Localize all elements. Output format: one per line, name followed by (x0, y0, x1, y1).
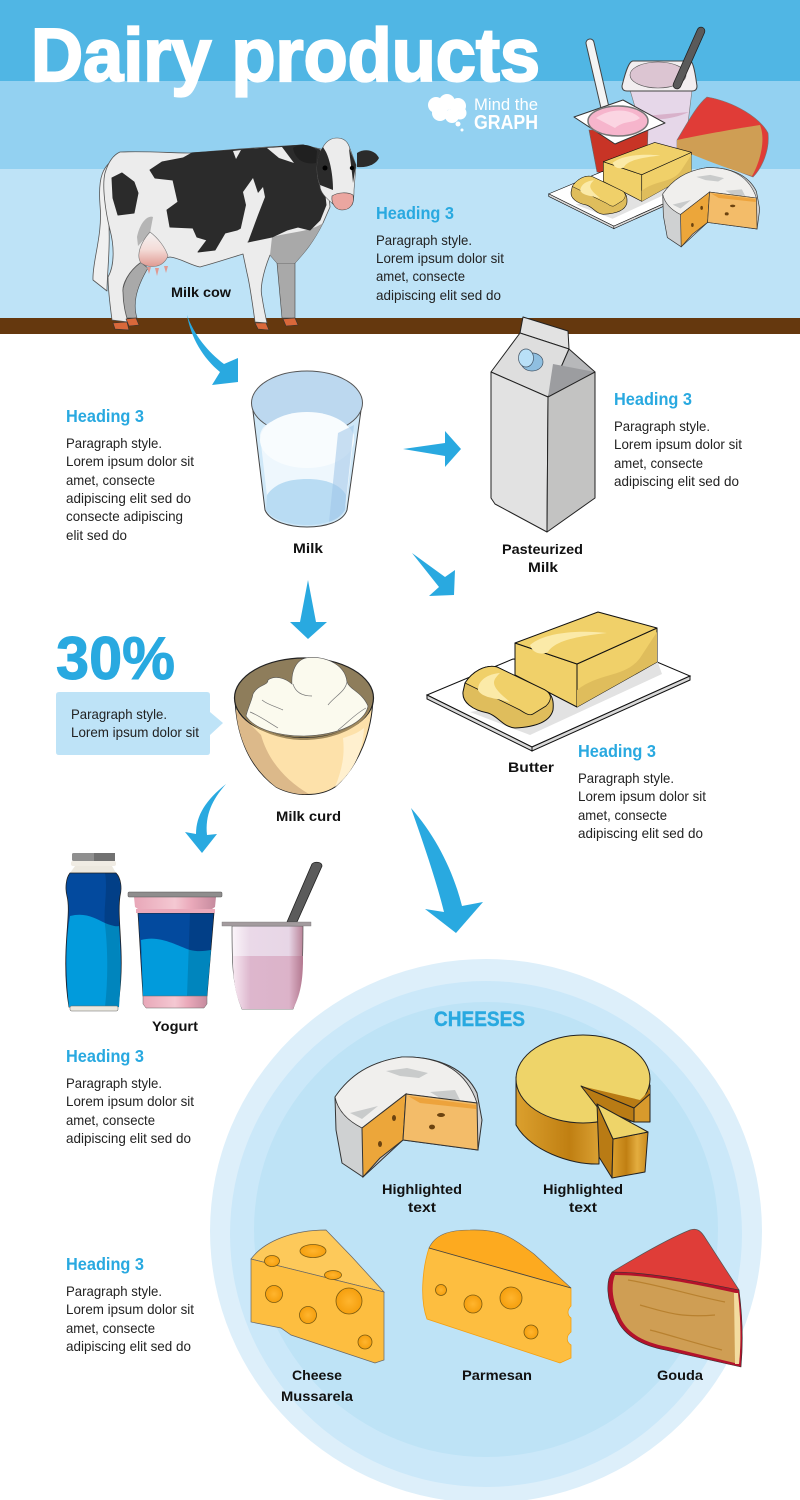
text block: butter: adipiscing elit sed do (578, 825, 703, 841)
label: Highlighted text (brie): text (408, 1199, 436, 1215)
text block: butter (578, 741, 706, 841)
logo: Mind the Graph (428, 94, 538, 134)
ground strip (0, 318, 800, 334)
text block: cheese note: Lorem ipsum dolor sit (66, 1301, 194, 1317)
text block: pasteurized: amet, consecte (614, 455, 703, 471)
yogurt pot with spoon (222, 862, 322, 1009)
text block: milk: amet, consecte (66, 472, 155, 488)
icon: bottle cap (518, 349, 543, 371)
label: Yogurt: Yogurt (152, 1018, 198, 1034)
grey chest (270, 223, 323, 263)
illustration: milk cow (93, 138, 379, 330)
label: Highlighted text (wheel): Highlighted (543, 1181, 623, 1197)
label: Milk curd: Milk curd (276, 808, 341, 824)
red yogurt cup (574, 43, 665, 176)
arrow: curd to yogurt (185, 784, 226, 853)
text block: yogurt: amet, consecte (66, 1112, 155, 1128)
hero food group (549, 31, 768, 247)
illustration: parmesan (423, 1230, 571, 1363)
label: Butter: Butter (508, 759, 555, 775)
illustration: brie (335, 1057, 482, 1177)
text block: milk: adipiscing elit sed do (66, 490, 191, 506)
label: Milk: Milk (293, 540, 323, 556)
text block: pasteurized (614, 389, 742, 489)
arrow: milk to butter (412, 553, 455, 596)
logo text: Mind the (474, 95, 538, 114)
text block: yogurt: adipiscing elit sed do (66, 1130, 191, 1146)
label: Cheese Mussarela: Cheese (292, 1367, 342, 1383)
text block: milk: consecte adipiscing (66, 508, 183, 524)
text block: cow heading (376, 203, 504, 303)
hooves (113, 318, 298, 330)
text block: pasteurized: Paragraph style. (614, 418, 710, 434)
text block: milk: Lorem ipsum dolor sit (66, 453, 194, 469)
label: Gouda: Gouda (657, 1367, 703, 1383)
black patches (112, 145, 326, 252)
white spots (233, 147, 294, 242)
gouda wedge (677, 97, 768, 177)
label: Pasteurized Milk (502, 541, 583, 575)
callout (56, 692, 223, 755)
far legs (122, 262, 148, 318)
yogurt cup (128, 892, 222, 1008)
text block: cheese note (66, 1254, 194, 1354)
text block: pasteurized: adipiscing elit sed do (614, 473, 739, 489)
rear yogurt cup (622, 31, 701, 148)
yogurt bottle (66, 853, 121, 1011)
illustration: cheese wheel (516, 1035, 650, 1178)
text block: milk: elit sed do (66, 527, 127, 543)
text block: milk: Heading 3 (66, 406, 144, 426)
label: Highlighted text (wheel): text (569, 1199, 597, 1215)
logo text: GRAPH (474, 112, 538, 134)
label: Highlighted text (brie): Highlighted (382, 1181, 462, 1197)
udder (139, 232, 168, 276)
text block: yogurt: Paragraph style. (66, 1075, 162, 1091)
arrow: cow to milk (187, 315, 238, 385)
arrow: milk to pasteurized (403, 431, 461, 467)
text block: butter: Heading 3 (578, 741, 656, 761)
grey flank shadow (137, 217, 153, 246)
label: Cheese Mussarela (281, 1367, 353, 1404)
illustration: glass of milk (252, 371, 362, 527)
text block: milk (66, 406, 194, 543)
text block: cow heading: adipiscing elit sed do (376, 287, 501, 303)
text block: yogurt: Lorem ipsum dolor sit (66, 1093, 194, 1109)
arrow: milk to curd (290, 580, 327, 639)
tail (93, 157, 118, 291)
sky background bands (0, 0, 800, 318)
icon: brain (428, 94, 466, 132)
text block: butter: Lorem ipsum dolor sit (578, 788, 706, 804)
cheese circle (210, 959, 762, 1500)
text block: cheese note: Paragraph style. (66, 1283, 162, 1299)
callout: Paragraph style. (71, 706, 167, 722)
callout: Lorem ipsum dolor sit (71, 724, 199, 740)
label: Pasteurized Milk: Pasteurized (502, 541, 583, 557)
cow head (293, 138, 379, 210)
illustration: bowl of milk curd (234, 657, 374, 794)
text block: cow heading: Paragraph style. (376, 232, 472, 248)
text block: yogurt: Heading 3 (66, 1046, 144, 1066)
label: Highlighted text (wheel) (543, 1181, 623, 1215)
illustration: milk carton (491, 317, 595, 532)
heading: CHEESES: CHEESES (434, 1008, 525, 1031)
label: Cheese Mussarela: Mussarela (281, 1388, 353, 1404)
text block: butter: Paragraph style. (578, 770, 674, 786)
text block: cow heading: Heading 3 (376, 203, 454, 223)
text block: milk: Paragraph style. (66, 435, 162, 451)
label: Milk cow: Milk cow (171, 284, 231, 300)
illustration: gouda (608, 1229, 742, 1367)
label: Pasteurized Milk: Milk (528, 559, 558, 575)
text block: pasteurized: Heading 3 (614, 389, 692, 409)
text block: yogurt (66, 1046, 194, 1146)
cow body (104, 145, 330, 323)
stat: 30%: 30% (56, 625, 175, 692)
curd (246, 657, 368, 736)
arrow: curd to cheeses (411, 808, 483, 933)
illustration: mozzarella (251, 1230, 384, 1363)
text block: cheese note: amet, consecte (66, 1320, 155, 1336)
brie (663, 168, 760, 247)
illustration: butter (427, 612, 690, 751)
text block: cow heading: amet, consecte (376, 268, 465, 284)
text block: butter: amet, consecte (578, 807, 667, 823)
illustration: yogurt products (66, 853, 322, 1011)
label: Highlighted text (brie) (382, 1181, 462, 1215)
text block: pasteurized: Lorem ipsum dolor sit (614, 436, 742, 452)
text block: cow heading: Lorem ipsum dolor sit (376, 250, 504, 266)
text block: cheese note: adipiscing elit sed do (66, 1338, 191, 1354)
title: Dairy products (31, 13, 540, 97)
text block: cheese note: Heading 3 (66, 1254, 144, 1274)
butter on plate (549, 142, 712, 229)
label: Parmesan: Parmesan (462, 1367, 532, 1383)
logo text (474, 95, 538, 134)
